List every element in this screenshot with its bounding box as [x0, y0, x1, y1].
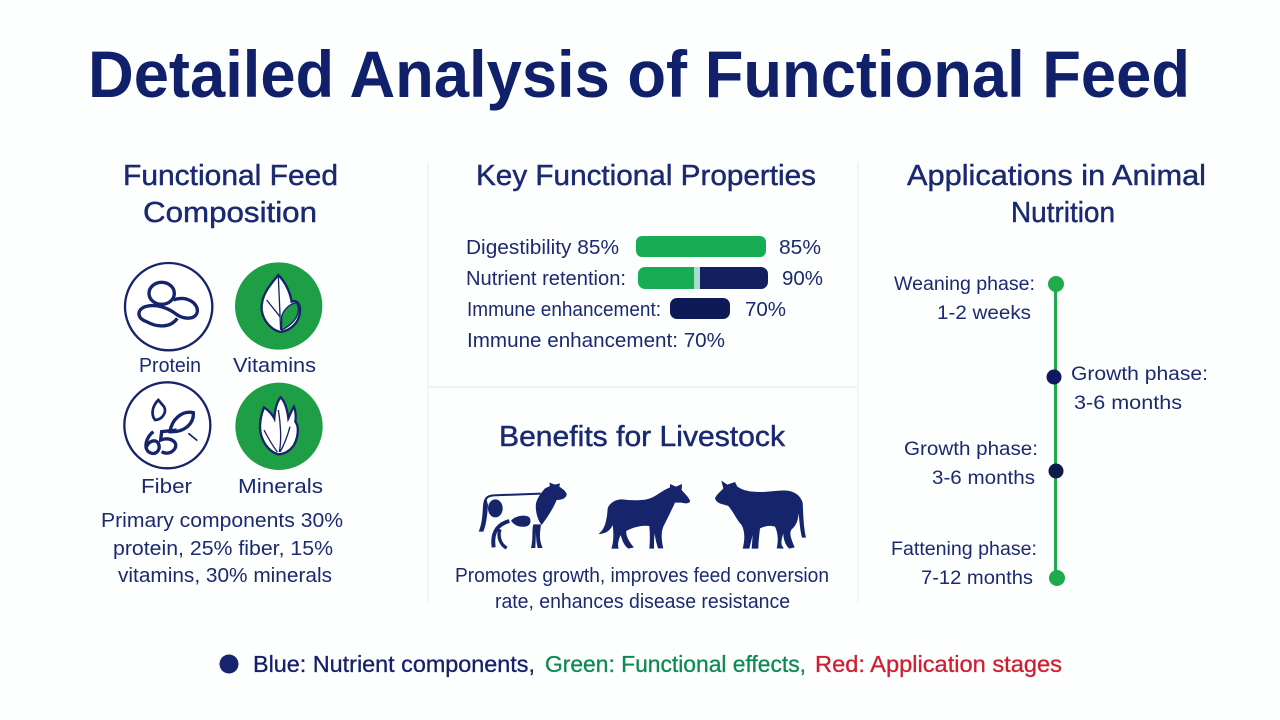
heading: applications: Nutrition — [1011, 197, 1115, 229]
label: fiber: Fiber — [141, 476, 192, 498]
icon: minerals — [235, 383, 323, 470]
text block: benefits description — [455, 565, 829, 613]
text: immune enhancement value: Immune enhancement: 70% — [467, 330, 725, 352]
legend: Green: Functional effects, — [545, 651, 806, 677]
timeline — [1046, 276, 1065, 586]
heading: composition — [123, 160, 338, 229]
label: growth phase left: Growth phase: — [904, 439, 1038, 460]
label: weaning phase: 1-2 weeks — [937, 303, 1031, 324]
panel: benefits for livestock — [455, 421, 829, 613]
bar: nutrient retention: Nutrient retention: — [466, 268, 626, 290]
text block: benefits description: Promotes growth, improves feed conversion — [455, 565, 829, 587]
icon: spotted cow — [479, 483, 567, 548]
text block: benefits description: rate, enhances disease resistance — [495, 591, 790, 613]
heading: applications — [907, 160, 1206, 229]
icon: protein — [125, 263, 212, 350]
bar: immune enhancement: 70% — [745, 299, 786, 321]
label: fattening phase: 7-12 months — [921, 568, 1033, 589]
label: minerals: Minerals — [238, 476, 323, 498]
icon: vitamins — [235, 262, 322, 350]
legend: Red: Application stages — [815, 651, 1062, 677]
panel: functional feed composition — [101, 160, 343, 587]
text block: primary components: Primary components 30% — [101, 510, 343, 532]
bar: nutrient retention: 90% — [782, 268, 823, 290]
text block: primary components: vitamins, 30% minerals — [118, 565, 332, 587]
heading: composition: Composition — [143, 197, 317, 229]
label: fattening phase — [891, 539, 1037, 589]
legend: Blue: Nutrient components, — [253, 651, 535, 677]
bar: digestibility — [466, 236, 821, 259]
heading: benefits: Benefits for Livestock — [499, 421, 786, 453]
label: fattening phase: Fattening phase: — [891, 539, 1037, 560]
bar: immune enhancement — [467, 298, 786, 321]
bar: nutrient retention — [466, 267, 823, 290]
label: growth phase left: 3-6 months — [932, 468, 1035, 489]
label: growth phase right — [1071, 364, 1208, 414]
label: protein: Protein — [139, 355, 201, 377]
bar: digestibility: 85% — [779, 237, 821, 259]
label: vitamins: Vitamins — [233, 355, 316, 377]
label: growth phase right: 3-6 months — [1074, 393, 1182, 414]
heading: applications: Applications in Animal — [907, 160, 1206, 192]
label: growth phase right: Growth phase: — [1071, 364, 1208, 385]
title: Detailed Analysis of Functional Feed — [88, 37, 1190, 111]
label: weaning phase: Weaning phase: — [894, 274, 1035, 295]
bar: immune enhancement: Immune enhancement: — [467, 299, 661, 321]
icon: fiber — [124, 382, 210, 468]
bar: digestibility: Digestibility 85% — [466, 237, 619, 259]
text block: primary components — [101, 510, 343, 587]
label: growth phase left — [904, 439, 1038, 489]
heading: key functional properties: Key Functional Properties — [476, 160, 816, 192]
panel: key functional properties — [466, 160, 823, 352]
heading: composition: Functional Feed — [123, 160, 338, 192]
legend — [220, 651, 1062, 677]
icon: horse — [598, 484, 690, 549]
label: weaning phase — [894, 274, 1035, 324]
icon: bull — [715, 481, 806, 549]
panel: applications in animal nutrition — [891, 160, 1208, 589]
text block: primary components: protein, 25% fiber, 15% — [113, 538, 333, 560]
